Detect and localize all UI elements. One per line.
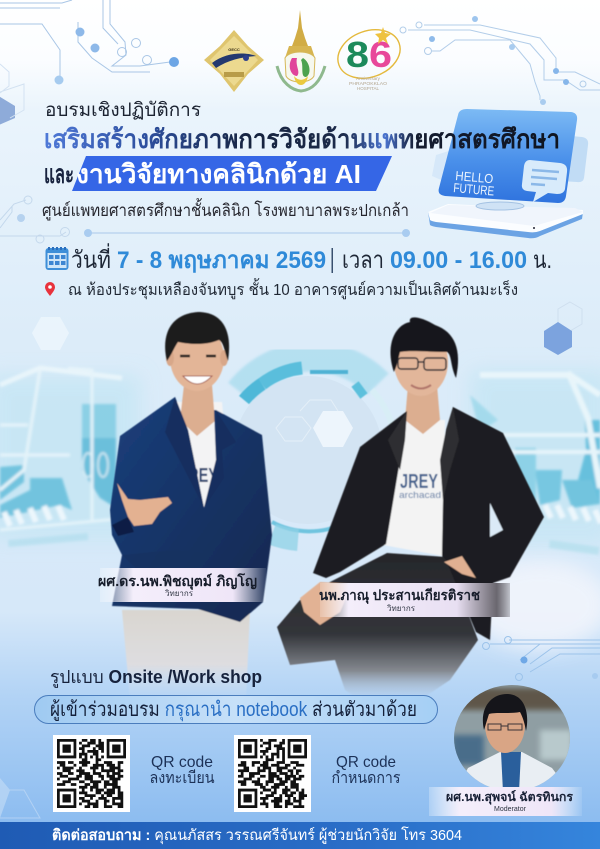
wide pale ring xyxy=(240,357,378,392)
nameplate: left speaker: ผศ.ดร.นพ.พิชญุตม์ ภิญโญ xyxy=(98,572,257,590)
hexagons center xyxy=(276,400,353,447)
nameplate: right speaker: นพ.ภาณุ ประสานเกียรติราช xyxy=(319,587,480,604)
trousers xyxy=(277,553,478,700)
logo: gold diamond: GECC xyxy=(228,47,240,52)
trousers xyxy=(122,610,250,700)
heading: main title line 2 xyxy=(44,156,392,191)
center disc xyxy=(234,376,382,524)
shirt print: archacad xyxy=(399,490,441,500)
doctor coat xyxy=(466,752,556,787)
moderator nameplate: Moderator xyxy=(494,806,527,813)
hair xyxy=(165,312,229,361)
doctor glasses xyxy=(488,724,522,730)
screen label xyxy=(453,168,495,199)
hair xyxy=(391,317,458,378)
QR label: registration xyxy=(150,754,215,787)
notice pill: ผู้เข้าร่วมอบรม กรุณานำ notebook ส่วนตัวมาด้วย xyxy=(50,699,417,722)
decoration: lower left hexagons xyxy=(0,778,40,818)
decoration: hexagons right xyxy=(544,302,582,355)
mouth xyxy=(411,385,431,388)
icon: location pin xyxy=(45,282,55,296)
logo: 86th anniversary: Anniversary xyxy=(356,76,381,81)
logo: 86th anniversary xyxy=(331,21,407,91)
doctor face xyxy=(485,712,525,753)
QR label: schedule: QR code xyxy=(336,754,396,771)
QR label: schedule xyxy=(332,754,401,787)
doctor hair xyxy=(483,694,527,731)
icon: calendar xyxy=(46,247,68,270)
ring arcs xyxy=(244,368,392,540)
decoration: horizontal divider with dots xyxy=(84,229,410,237)
decoration: lower right circuit xyxy=(482,636,600,680)
nameplate: left speaker: วิทยากร xyxy=(164,589,194,598)
shirt xyxy=(383,420,445,556)
decoration: hexagons left edge xyxy=(0,64,24,128)
decoration: circuit lines top right xyxy=(400,16,600,105)
speaker: right xyxy=(277,317,544,700)
hand on knee xyxy=(300,582,352,625)
soft base glow xyxy=(0,375,140,540)
heading: main title line 2: งานวิจัยทางคลินิกด้วย AI xyxy=(76,159,361,189)
left band details xyxy=(0,368,128,547)
speaker: left xyxy=(110,312,272,700)
heading: main title line 2: และ xyxy=(44,159,74,189)
tech hub graphic: bands, gear rings, hexagons xyxy=(0,317,600,650)
format heading: รูปแบบ Onsite /Work shop xyxy=(50,667,262,688)
QR code: schedule xyxy=(234,735,311,812)
date and time: เวลา xyxy=(342,247,384,274)
decoration: circuit lines top left xyxy=(0,0,179,84)
logo: 86th anniversary: 86 xyxy=(346,34,392,75)
QR label: registration: QR code xyxy=(151,754,213,771)
decoration: left middle circuit xyxy=(0,196,70,243)
device base xyxy=(428,202,583,238)
illustration: hello future device xyxy=(428,109,588,238)
shirt print: JREY xyxy=(180,465,218,487)
neck xyxy=(180,385,215,436)
subtitle: organiser: ศูนย์แพทยศาสตรศึกษาชั้นคลินิก โรงพยาบาลพระปกเกล้า xyxy=(42,198,409,221)
elbow gap xyxy=(490,503,503,537)
logos xyxy=(204,10,407,92)
hand xyxy=(117,483,172,526)
shirt print: JREY xyxy=(400,471,438,493)
date and time: 7 - 8 พฤษภาคม 2569 xyxy=(117,247,326,274)
venue: ณ ห้องประชุมเหลืองจันทบูร ชั้น 10 อาคารศูนย์ความเป็นเลิศด้านมะเร็ง xyxy=(68,278,518,300)
moderator nameplate: ผศ.นพ.สุพจน์ ฉัตรทินกร xyxy=(446,790,574,805)
date and time: 09.00 - 16.00 xyxy=(390,247,527,274)
logo: hospital crest xyxy=(277,10,325,91)
device back panels xyxy=(560,135,588,182)
device screen xyxy=(439,109,577,203)
shirt print xyxy=(399,471,441,500)
eyes and smile xyxy=(180,355,216,357)
title banner xyxy=(72,156,392,191)
screen label: HELLO xyxy=(455,168,494,186)
top-left hexagon xyxy=(32,317,69,350)
QR label: registration: ลงทะเบียน xyxy=(150,769,215,787)
moderator nameplate xyxy=(429,787,582,816)
heading: workshop label: อบรมเชิงปฏิบัติการ xyxy=(45,100,201,121)
QR label: schedule: กำหนดการ xyxy=(332,770,401,787)
moderator portrait xyxy=(454,685,570,787)
chat bubble xyxy=(522,160,567,202)
shirt xyxy=(175,402,232,520)
footer bar xyxy=(0,822,600,849)
logo: gold diamond xyxy=(204,30,264,92)
glasses xyxy=(398,358,446,370)
logo: 86th anniversary: PHRAPOKKLAO xyxy=(349,81,388,86)
footer bar: ติดต่อสอบถาม : คุณนภัสสร วรรณศรีจันทร์ ผู้ช่วยนักวิจัย โทร 3604 xyxy=(52,826,462,845)
neck xyxy=(405,385,440,434)
jacket xyxy=(110,397,272,622)
heading: main title line 1: เสริมสร้างศักยภาพการวิจัยด้านแพทยศาสตรศึกษา xyxy=(44,124,560,154)
face xyxy=(170,325,224,391)
hand on hip xyxy=(444,556,476,578)
right band details xyxy=(470,372,600,555)
date and time: น. xyxy=(533,247,552,274)
nameplate: right speaker xyxy=(319,583,510,617)
screen label: FUTURE xyxy=(453,180,495,199)
date and time xyxy=(71,243,552,274)
logo: 86th anniversary: HOSPITAL xyxy=(357,86,379,91)
nameplate: right speaker: วิทยากร xyxy=(386,604,416,613)
face xyxy=(394,328,448,396)
date and time: วันที่ xyxy=(71,243,111,274)
nameplate: left speaker xyxy=(98,568,266,602)
jacket xyxy=(313,407,544,640)
QR code: registration xyxy=(53,735,130,812)
